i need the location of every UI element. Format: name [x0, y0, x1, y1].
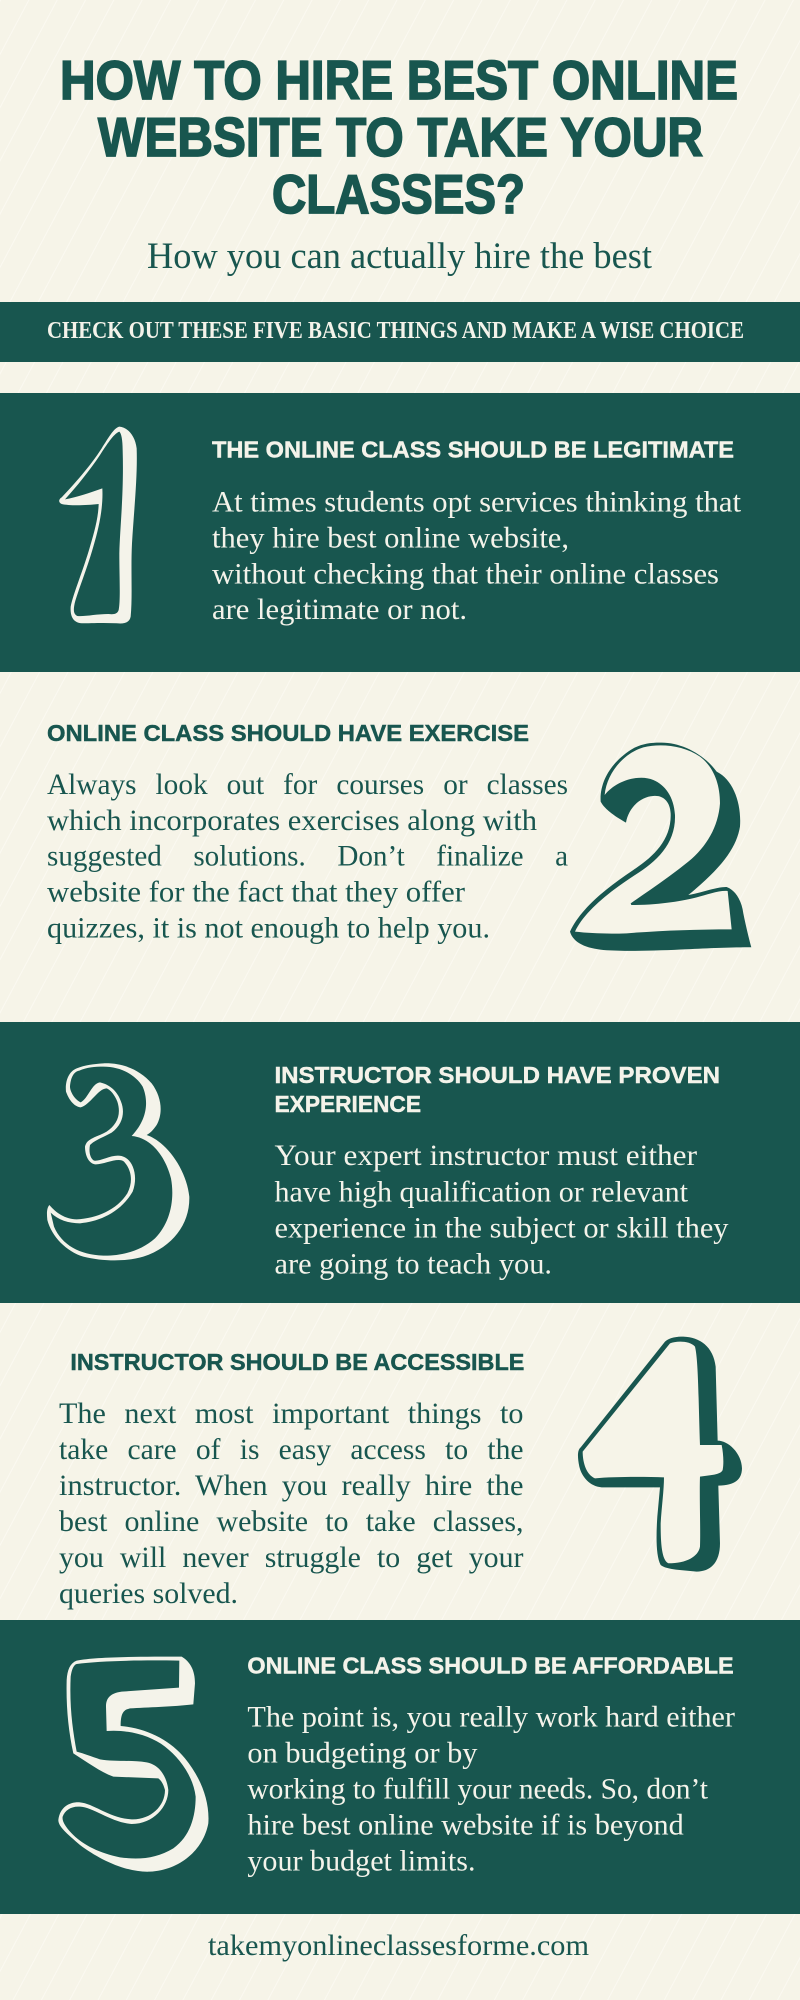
icon: number 2: [570, 743, 751, 951]
text: step 3 body: experience in the subject or skill they: [274, 1211, 728, 1244]
panel: step 1: [0, 393, 800, 672]
text: step 4 body: instructor. When you really hire the: [59, 1469, 524, 1502]
text: step 4 body: you will never struggle to get your: [59, 1541, 524, 1574]
text: step 4 body: [59, 1397, 524, 1610]
text: step 2 body: suggested solutions. Don’t finalize a: [47, 840, 568, 873]
text: step 1 body: without checking that their online classes: [212, 557, 719, 590]
heading: step 3: EXPERIENCE: [274, 1091, 421, 1117]
title: CLASSES?: [272, 163, 525, 225]
title: WEBSITE TO TAKE YOUR: [98, 106, 703, 168]
text: step 2 body: [47, 768, 568, 945]
heading: step 4: INSTRUCTOR SHOULD BE ACCESSIBLE: [70, 1349, 524, 1375]
text: step 3 body: Your expert instructor must either: [274, 1139, 697, 1172]
heading: step 3: INSTRUCTOR SHOULD HAVE PROVEN: [274, 1062, 720, 1088]
icon: number 1: [59, 427, 137, 624]
text: step 4 body: best online website to take classes,: [59, 1505, 524, 1538]
text: step 4 body: The next most important things to: [59, 1397, 524, 1430]
text: step 2 body: which incorporates exercises along with: [47, 804, 537, 837]
text: step 2 body: website for the fact that they offer: [47, 876, 465, 909]
text: step 5 body: your budget limits.: [247, 1845, 476, 1878]
panel: step 4: [59, 1337, 742, 1610]
panel: step 3: [0, 1022, 800, 1303]
title: [60, 49, 738, 225]
heading: step 3: [274, 1062, 720, 1117]
text: step 1 body: [212, 485, 742, 626]
banner: check out these five basic things: [0, 302, 800, 362]
icon: number 4: [578, 1337, 742, 1572]
text: step 3 body: [274, 1139, 728, 1280]
text: step 4 body: queries solved.: [59, 1577, 238, 1610]
heading: step 1: THE ONLINE CLASS SHOULD BE LEGITIMATE: [212, 436, 734, 462]
subtitle: How you can actually hire the best: [147, 236, 653, 277]
text: step 2 body: quizzes, it is not enough to help you.: [47, 912, 490, 945]
icon: number 5: [58, 1657, 208, 1872]
text: step 2 body: Always look out for courses or classes: [47, 768, 568, 801]
panel: step 2: [47, 720, 751, 951]
text: step 3 body: have high qualification or relevant: [274, 1175, 689, 1208]
text: step 5 body: The point is, you really work hard either: [247, 1701, 735, 1734]
text: step 1 body: they hire best online website,: [212, 521, 569, 554]
title: HOW TO HIRE BEST ONLINE: [60, 49, 738, 111]
text: step 5 body: working to fulfill your needs. So, don’t: [247, 1773, 709, 1806]
text: step 5 body: on budgeting or by: [247, 1737, 478, 1770]
heading: step 2: ONLINE CLASS SHOULD HAVE EXERCISE: [47, 720, 529, 746]
heading: step 5: ONLINE CLASS SHOULD BE AFFORDABLE: [247, 1653, 734, 1679]
text: step 1 body: are legitimate or not.: [212, 593, 467, 626]
text: step 5 body: hire best online website if is beyond: [247, 1809, 684, 1842]
text: step 4 body: take care of is easy access to the: [59, 1433, 524, 1466]
text: step 1 body: At times students opt services thinking that: [212, 485, 742, 518]
panel: step 5: [0, 1620, 800, 1914]
text: step 5 body: [247, 1701, 735, 1878]
footer: website: takemyonlineclassesforme.com: [208, 1929, 589, 1962]
icon: number 3: [47, 1063, 189, 1260]
text: step 3 body: are going to teach you.: [274, 1247, 552, 1280]
